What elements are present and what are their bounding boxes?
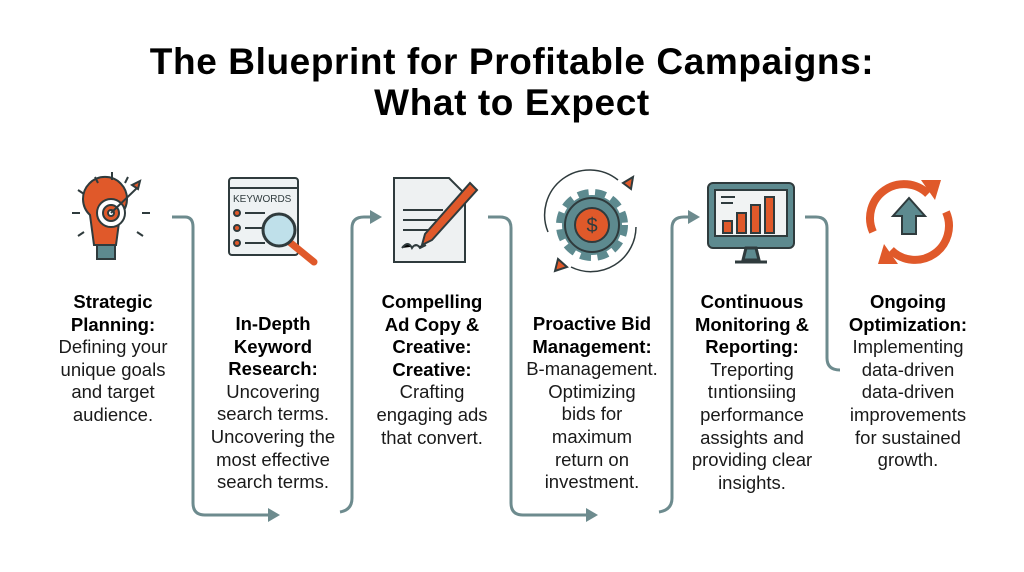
panel: optimization: for sustained [855,427,961,448]
icon: monitor chart [708,183,794,262]
panel: optimization: Implementing [852,336,964,357]
panel: monitoring: assights and [700,427,804,448]
title: What to Expect [374,82,650,123]
panel: ad copy: Creative: [392,336,472,357]
arrow: connector 1 [172,217,280,522]
panel: monitoring: Continuous [701,291,803,312]
panel: keyword research: Uncovering [226,381,320,402]
arrow: connector 5 [805,217,840,370]
panel: monitoring: Monitoring & [695,314,809,335]
panel: keyword research: Keyword [234,336,312,357]
panel: bid management: Management: [532,336,652,357]
panel: bid management [526,313,658,492]
icon: document pen [394,178,477,262]
panel: strategic planning: audience. [73,404,153,425]
panel: strategic planning: unique goals [61,359,165,380]
panel: bid management: Optimizing [548,381,636,402]
icon: keywords search: KEYWORDS [233,194,292,205]
panel: optimization: data-driven [862,359,954,380]
panel: keyword research: Uncovering the [211,426,335,447]
panel: keyword research: search terms. [217,403,329,424]
panel: strategic planning [58,291,168,425]
icon: keywords search [229,178,314,262]
panel: optimization: data-driven [862,381,954,402]
panel: strategic planning: Strategic [73,291,153,312]
panel: bid management: bids for [562,403,622,424]
panel: keyword research: In-Depth [235,313,310,334]
panel: ad copy [376,291,488,448]
panel: optimization: growth. [878,449,938,470]
arrow: connector 2 [340,210,382,512]
panel: monitoring [692,291,812,493]
panel: monitoring: Treporting [710,359,794,380]
icon: cycle up arrow [870,180,949,264]
panel: strategic planning: and target [71,381,155,402]
panel: keyword research [211,313,335,492]
panel: monitoring: insights. [718,472,786,493]
panel: keyword research: search terms. [217,471,329,492]
panel: ad copy: Ad Copy & [385,314,479,335]
panel: ad copy: that convert. [381,427,483,448]
panel: ad copy: engaging ads [376,404,488,425]
panel: keyword research: Research: [228,358,318,379]
panel: optimization [849,291,967,470]
title [150,41,874,123]
icon: lightbulb target [72,172,150,259]
panel: monitoring: performance [700,404,804,425]
panel: bid management: investment. [545,471,639,492]
arrow: connector 4 [659,210,700,512]
panel: bid management: B-management. [526,358,658,379]
panel: keyword research: most effective [216,449,330,470]
panel: optimization: Ongoing [870,291,946,312]
panel: bid management: Proactive Bid [533,313,651,334]
title: The Blueprint for Profitable Campaigns: [150,41,874,82]
panel: bid management: maximum [552,426,632,447]
arrow: connector 3 [488,217,598,522]
panel: monitoring: tıntionsiing [708,381,796,402]
icon: gear dollar: $ [586,215,598,237]
panel: monitoring: providing clear [692,449,812,470]
panel: strategic planning: Planning: [71,314,155,335]
panel: ad copy: Compelling [382,291,482,312]
panel: bid management: return on [555,449,629,470]
panel: monitoring: Reporting: [705,336,799,357]
panel: strategic planning: Defining your [58,336,168,357]
panel: optimization: Optimization: [849,314,967,335]
icon: gear dollar [545,170,636,272]
panel: ad copy: Creative: [392,359,472,380]
panel: optimization: improvements [850,404,966,425]
panel: ad copy: Crafting [400,381,464,402]
